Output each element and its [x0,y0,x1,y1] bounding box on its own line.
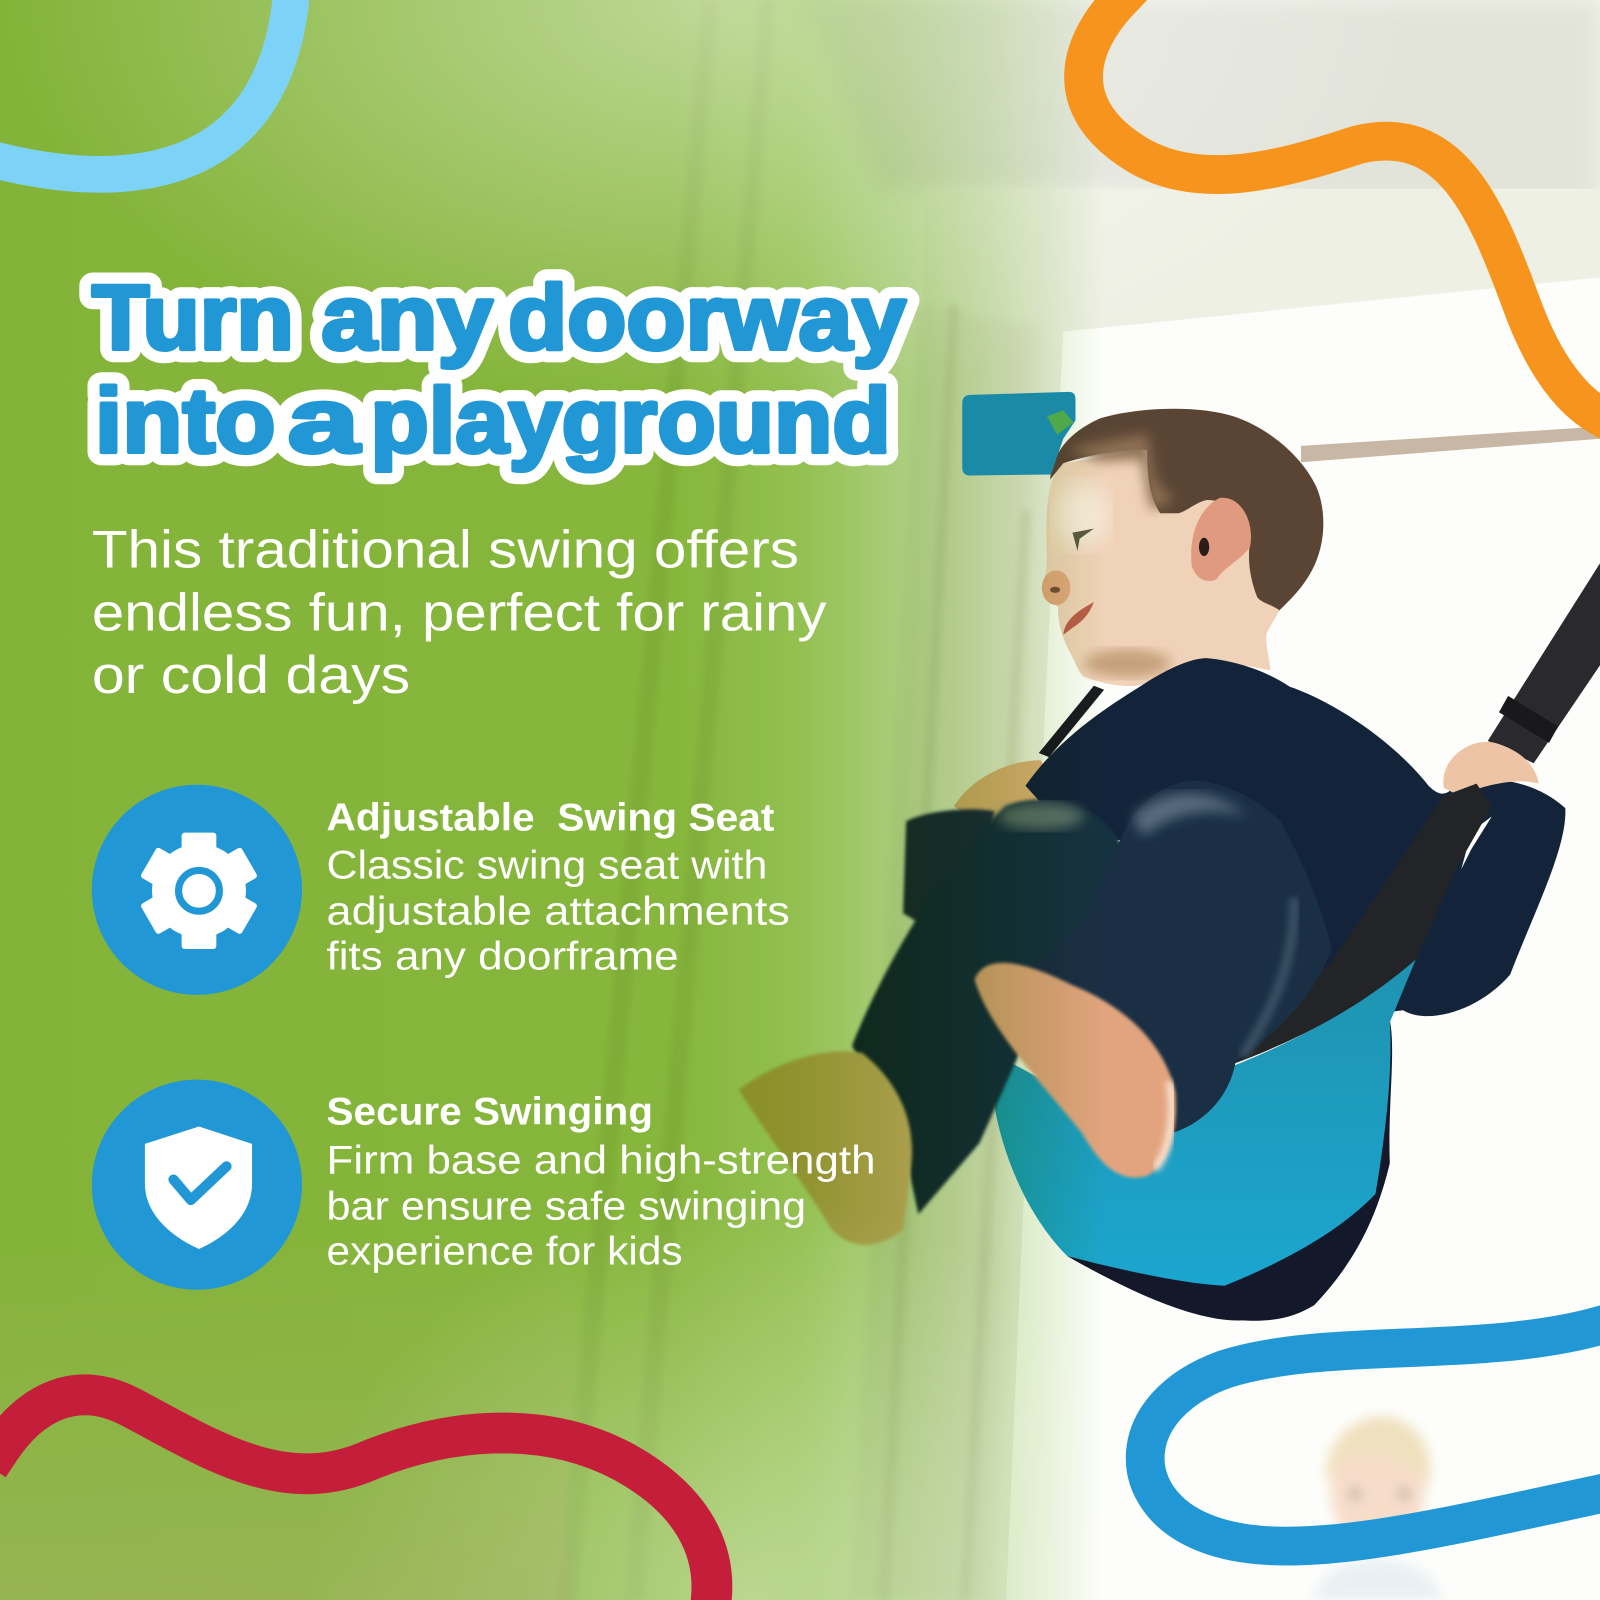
boy: buckle [1499,696,1558,743]
boy: hairline fade [1066,434,1173,510]
boy: far knee highlight [998,803,1084,830]
boy: cord [1039,686,1104,757]
boy: seat underside [1067,1020,1392,1321]
title outline: any [321,267,493,369]
title fill: playground [370,370,891,472]
boy: near hand [1443,742,1539,796]
boy: far leg [852,799,1122,1214]
photo: boy on swing [739,409,1600,1321]
boy: nose [1042,570,1070,605]
boy: nostril [1050,587,1060,593]
title outline: playground [370,370,891,472]
description: fits any doorframe [327,934,679,978]
boy: far foot [739,1051,912,1245]
description: Firm base and high-strength [327,1138,876,1182]
boy: hair [1050,409,1323,610]
title fill: into [95,370,276,472]
door bracket [962,392,1076,476]
boy: far sleeve [903,809,995,929]
title outline: a [288,370,360,472]
wave: red bottom left [0,1395,712,1600]
heading: Adjustable Swing Seat [327,797,775,840]
description: bar ensure safe swinging [327,1184,806,1228]
boy: torso and near arm [1026,658,1565,1020]
heading: Secure Swinging [327,1090,653,1133]
wave: blue bottom right [1145,1326,1600,1546]
boy: jaw shadow [1085,649,1170,678]
boy: forehead highlight [1055,483,1108,548]
boy: eye [1072,529,1094,551]
boy: ear [1191,498,1251,581]
intro text: endless fun, perfect for rainy [92,584,827,643]
intro text: This traditional swing offers [92,520,799,579]
title outline: into [95,370,276,472]
title fill: Turn [92,267,294,369]
wave: orange top right [1084,0,1600,416]
title [92,267,906,472]
title fill: doorway [508,267,906,369]
bracket leaf [1047,410,1073,435]
description: Classic swing seat with [327,844,767,888]
boy: near leg [1031,781,1332,1133]
title fill [92,267,906,472]
boy: neck and head [1042,450,1280,686]
description [327,844,790,978]
description: adjustable attachments [327,889,790,933]
boy: ear canal [1199,538,1209,556]
intro text: or cold days [92,646,410,705]
title fill: a [288,370,360,472]
title outline: doorway [508,267,906,369]
description: experience for kids [327,1229,683,1273]
feature: adjustable swing seat [92,785,790,995]
boy: upper strap [1488,563,1600,763]
title outline: Turn [92,267,294,369]
boy: seat back strap [1230,784,1492,1065]
description [327,1138,876,1273]
boy: near knee highlight [1133,793,1247,837]
photo: second child in background [1311,1416,1444,1600]
icon: shield with check [92,1080,302,1290]
boy: mouth [1063,602,1094,635]
boy: teal seat [995,958,1416,1286]
boy: near foot [974,963,1176,1178]
boy: near leg edge highlight [1243,898,1294,1056]
wave: light blue top left [0,0,291,174]
boy: far hand [954,760,1061,827]
title fill: any [321,267,493,369]
feature: secure swinging [92,1080,876,1290]
intro text [92,520,827,705]
boy: heel highlight [1155,1082,1172,1169]
icon: gear [92,785,302,995]
title outline [92,267,906,472]
boy: gap behind strap [1461,816,1492,869]
